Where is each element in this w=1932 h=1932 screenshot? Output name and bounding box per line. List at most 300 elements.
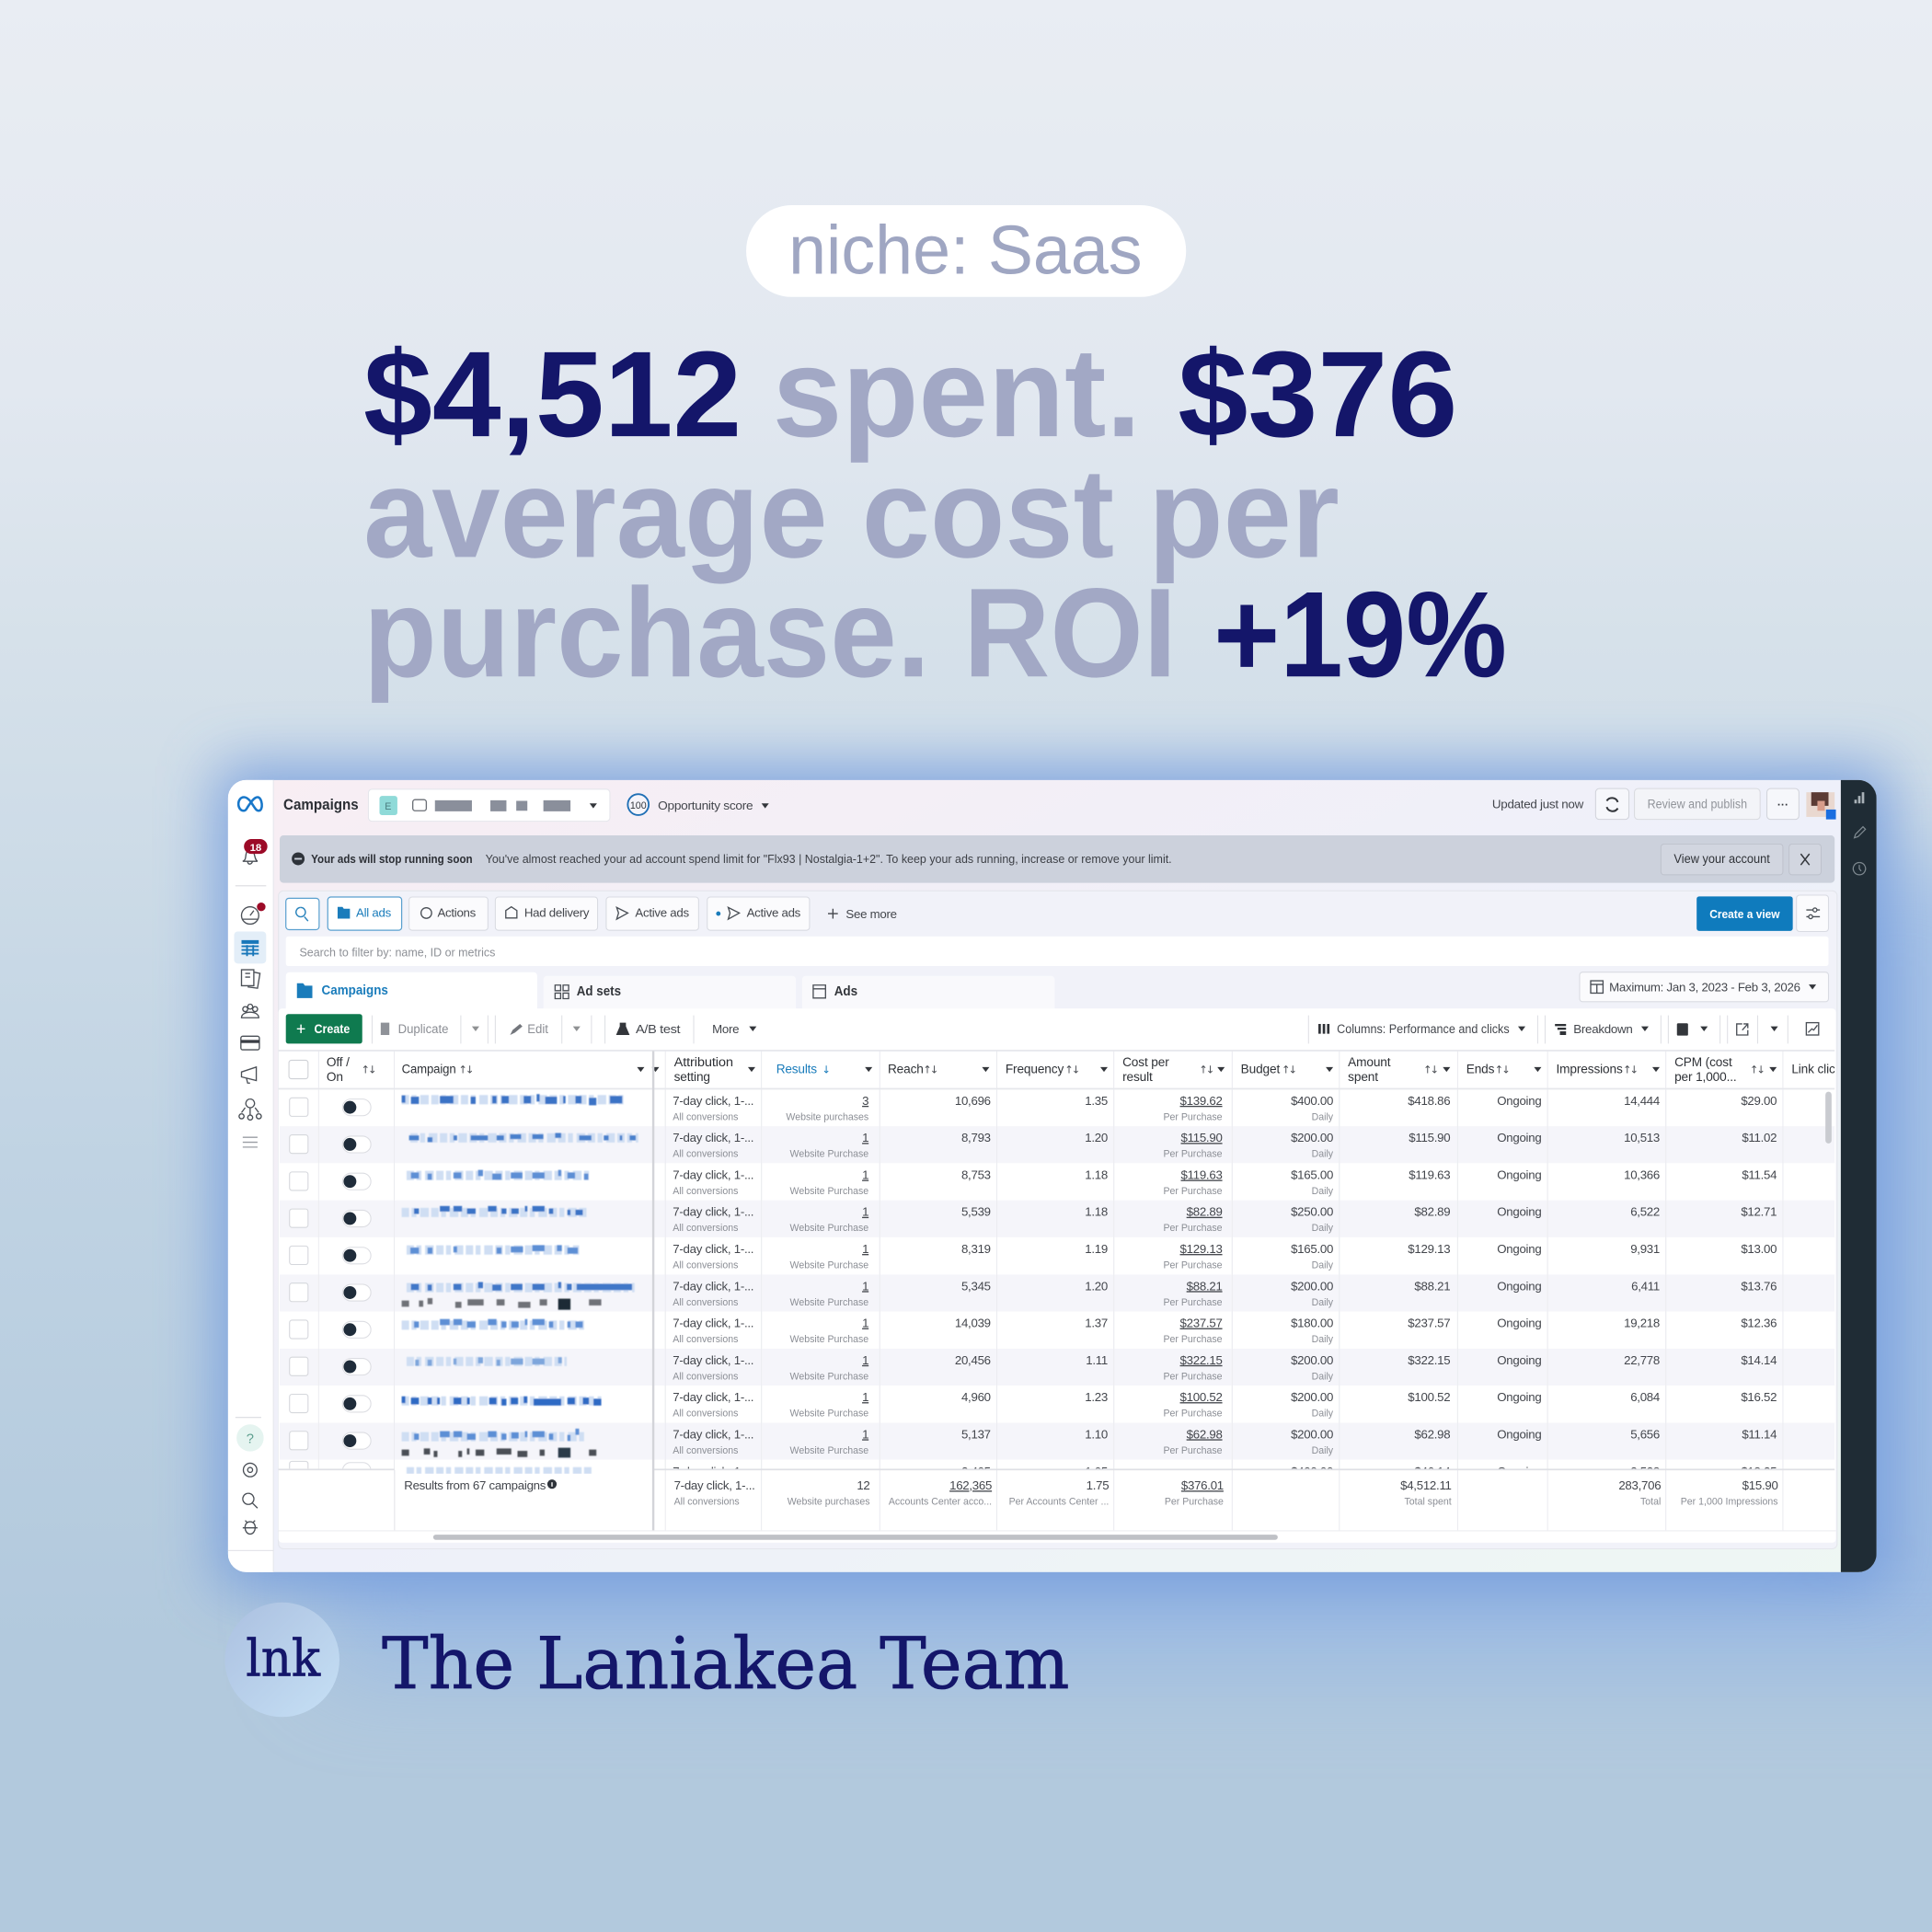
- icon: notification bell: 18: [250, 843, 261, 854]
- table row 6: Per Purchase: [1163, 1297, 1223, 1308]
- table row 1: Ongoing: [1497, 1094, 1541, 1108]
- create button: Create: [315, 1022, 350, 1036]
- duplicate button: [372, 1016, 488, 1043]
- edit button: [495, 1016, 592, 1043]
- table row 2: $200.00: [1291, 1131, 1333, 1144]
- table row 7: All conversions: [673, 1334, 738, 1345]
- table row 7: $12.36: [1741, 1317, 1777, 1330]
- table header: CPM (cost: [1674, 1055, 1732, 1069]
- see more: See more: [845, 907, 897, 921]
- active ads chip: Active ads: [635, 905, 689, 919]
- table row 1: $29.00: [1741, 1094, 1777, 1108]
- table row 4: $12.71: [1741, 1205, 1777, 1219]
- table row 3: $119.63: [1181, 1167, 1223, 1181]
- niche pill: niche: Saas: [788, 211, 1143, 288]
- table row 6: $13.76: [1741, 1279, 1777, 1293]
- left navigation sidebar: [228, 780, 274, 1572]
- partially hidden table row 11: [290, 1461, 1777, 1479]
- table row 5: 7-day click, 1-...: [673, 1242, 753, 1256]
- frozen column divider: [652, 1051, 654, 1530]
- actions chip: [409, 897, 488, 930]
- table header: ↑↓: [1423, 1064, 1437, 1076]
- table row 4: All conversions: [673, 1223, 738, 1234]
- table header: Impressions: [1557, 1063, 1623, 1076]
- table row 8: 20,456: [955, 1353, 991, 1367]
- horizontal scrollbar: [433, 1535, 1278, 1540]
- table row 1: $418.86: [1408, 1094, 1450, 1108]
- table row 6: Daily: [1312, 1297, 1334, 1308]
- table row 2: $115.90: [1181, 1131, 1223, 1144]
- table row 5: [290, 1242, 1777, 1271]
- table header: Link clicks: [1791, 1063, 1847, 1076]
- table row 4: Website Purchase: [790, 1223, 868, 1234]
- table row 4: 1.18: [1085, 1205, 1108, 1219]
- table row 8: Website Purchase: [790, 1371, 868, 1382]
- create a view button: [1696, 896, 1793, 931]
- close button: [1789, 844, 1821, 875]
- table row 5: 1: [862, 1242, 868, 1256]
- icon: notification bell: [243, 839, 268, 864]
- table row 7: 19,218: [1624, 1317, 1660, 1330]
- icon: help: ?: [247, 1432, 254, 1446]
- table row 7: Ongoing: [1497, 1317, 1541, 1330]
- icon: pencil: [1855, 827, 1866, 838]
- icon: alert: [292, 853, 305, 865]
- more button: [1767, 788, 1799, 820]
- table row 2: Website Purchase: [790, 1149, 868, 1160]
- blue glow behind dashboard: [217, 766, 1890, 1590]
- table row 4: Daily: [1312, 1223, 1334, 1234]
- tab: ads: [802, 976, 1054, 1009]
- table row 10: $62.98: [1187, 1427, 1223, 1441]
- table row 1: 3: [862, 1094, 868, 1108]
- table row 3: $165.00: [1291, 1167, 1333, 1181]
- table row 10: 7-day click, 1-...: [673, 1427, 753, 1441]
- opportunity score: [627, 794, 769, 815]
- table header: ↑↓: [1495, 1064, 1509, 1076]
- more menu: [712, 1022, 756, 1036]
- icon: bug: [243, 1521, 258, 1534]
- table row 7: 1.37: [1085, 1317, 1108, 1330]
- table row 2: Per Purchase: [1163, 1149, 1223, 1160]
- table row 9: [290, 1390, 1777, 1420]
- table row 10: 5,137: [961, 1427, 991, 1441]
- chart icon button: [1806, 1023, 1819, 1035]
- table row 2: 7-day click, 1-...: [673, 1131, 753, 1144]
- refresh button: [1595, 788, 1629, 820]
- table row 5: Per Purchase: [1163, 1260, 1223, 1271]
- headline: $4,512: [363, 327, 742, 463]
- table row 6: All conversions: [673, 1297, 738, 1308]
- table row 9: 1: [862, 1390, 868, 1404]
- table row 5: Daily: [1312, 1260, 1334, 1271]
- icon: meta logo: [238, 798, 262, 811]
- table row 6: $200.00: [1291, 1279, 1333, 1293]
- all ads chip: All ads: [356, 905, 392, 919]
- table row 10: Daily: [1312, 1445, 1334, 1456]
- table row 9: Per Purchase: [1163, 1409, 1223, 1420]
- breakdown selector: Breakdown: [1573, 1022, 1633, 1036]
- table row 4: 5,539: [961, 1205, 991, 1219]
- table row 3: [290, 1167, 1777, 1197]
- table row 2: Ongoing: [1497, 1131, 1541, 1144]
- headline: +19%: [1213, 567, 1507, 703]
- alert banner: Your ads will stop running soon: [311, 852, 473, 866]
- table row 8: 1: [862, 1353, 868, 1367]
- table row 6: Ongoing: [1497, 1279, 1541, 1293]
- table header: Cost per: [1122, 1055, 1169, 1069]
- table totals footer: [279, 1468, 1836, 1531]
- icon: help: [236, 1424, 264, 1452]
- active ads chip with dot: [707, 897, 810, 930]
- table row 8: 1.11: [1086, 1353, 1108, 1367]
- table header: Ends: [1466, 1063, 1495, 1076]
- active ads chip: [606, 897, 698, 930]
- level tabs: [286, 972, 1828, 1009]
- table row 1: Website purchases: [786, 1111, 868, 1122]
- icon: gauge: [241, 903, 266, 924]
- icon: chart: [1855, 792, 1864, 803]
- table row 6: 1: [862, 1279, 868, 1293]
- columns selector: Columns: Performance and clicks: [1337, 1022, 1510, 1036]
- all ads chip: [328, 897, 402, 930]
- table column dividers: [318, 1051, 1783, 1530]
- table row 5: 9,931: [1630, 1242, 1660, 1256]
- table header: [279, 1050, 1847, 1089]
- review and publish button: [1635, 788, 1760, 820]
- table row 9: 4,960: [961, 1390, 991, 1404]
- table header: ↑↓: [458, 1064, 473, 1076]
- header checkbox: [289, 1060, 308, 1079]
- table row 9: $100.52: [1408, 1390, 1450, 1404]
- table header: Amount: [1348, 1055, 1391, 1069]
- edit button: Edit: [527, 1022, 548, 1036]
- table row 4: Ongoing: [1497, 1205, 1541, 1219]
- table row 8: Daily: [1312, 1371, 1334, 1382]
- table row 1: 7-day click, 1-...: [673, 1094, 753, 1108]
- headline: average cost per: [363, 443, 1340, 584]
- table row 3: 8,753: [961, 1167, 991, 1181]
- table row 6: 1.20: [1085, 1279, 1108, 1293]
- table row 1: All conversions: [673, 1111, 738, 1122]
- headline: $376: [1178, 327, 1457, 463]
- table header: Campaign: [402, 1063, 456, 1076]
- columns selector: [1308, 1016, 1537, 1043]
- table header: Frequency: [1006, 1063, 1064, 1076]
- table row 6: [290, 1279, 1777, 1308]
- table row 10: [290, 1427, 1777, 1456]
- table row 8: 22,778: [1624, 1353, 1660, 1367]
- table row 5: Website Purchase: [790, 1260, 868, 1271]
- top bar: Campaigns: [283, 796, 359, 813]
- top bar: [283, 788, 1836, 822]
- table row 10: Ongoing: [1497, 1427, 1541, 1441]
- table row 1: 10,696: [955, 1094, 991, 1108]
- date range picker: [1580, 972, 1829, 1002]
- table row 2: Daily: [1312, 1149, 1334, 1160]
- tab: ads: Ads: [834, 984, 857, 999]
- table row 6: 5,345: [961, 1279, 991, 1293]
- table row 8: 7-day click, 1-...: [673, 1353, 753, 1367]
- table row 6: 6,411: [1631, 1279, 1660, 1293]
- panel: ads manager dashboard: [228, 780, 1877, 1572]
- headline: spent.: [773, 322, 1141, 464]
- search chip: [286, 898, 319, 929]
- icon: clock: [1853, 863, 1866, 875]
- table row 5: $129.13: [1408, 1242, 1450, 1256]
- table header: ↑↓: [1064, 1064, 1079, 1076]
- table totals footer: Per Purchase: [1165, 1496, 1224, 1507]
- table row 8: $322.15: [1180, 1353, 1223, 1367]
- table row 8: [290, 1353, 1777, 1382]
- partially hidden table row 11: 7-day click, 1-...: [673, 1465, 753, 1478]
- right dark sidebar: [1841, 780, 1877, 1572]
- icon: search: [243, 1493, 258, 1508]
- table row 4: 6,522: [1630, 1205, 1660, 1219]
- table row 2: 1: [862, 1131, 868, 1144]
- alert banner: You've almost reached your ad account spend limit for "Flx93 | Nostalgia-1+2". To keep your ads running, increase or remove your limit.: [486, 852, 1172, 866]
- had delivery chip: Had delivery: [524, 905, 590, 919]
- table row 1: $400.00: [1291, 1094, 1333, 1108]
- table row 4: $250.00: [1291, 1205, 1333, 1219]
- table row 9: Daily: [1312, 1409, 1334, 1420]
- table row 1: 14,444: [1624, 1094, 1660, 1108]
- view account button: [1661, 844, 1783, 875]
- table row 6: 7-day click, 1-...: [673, 1279, 753, 1293]
- filter chips row: [286, 895, 1828, 931]
- ab test button: A/B test: [636, 1022, 681, 1036]
- table row 2: All conversions: [673, 1149, 738, 1160]
- table row 3: Website Purchase: [790, 1186, 868, 1197]
- icon: campaigns table active: [234, 931, 266, 963]
- tab: campaigns: Campaigns: [322, 983, 388, 998]
- search field: [286, 937, 1828, 966]
- icon: audience: [241, 1005, 259, 1018]
- table row 8: All conversions: [673, 1371, 738, 1382]
- table totals footer: All conversions: [674, 1496, 740, 1507]
- brand logo disc: [224, 1603, 339, 1717]
- table row 7: $237.57: [1408, 1317, 1450, 1330]
- table row 3: $11.54: [1742, 1167, 1777, 1181]
- table row 4: [290, 1205, 1777, 1234]
- table totals footer: 1.75: [1087, 1478, 1109, 1492]
- table row 7: 14,039: [955, 1317, 991, 1330]
- search field: Search to filter by: name, ID or metrics: [299, 945, 496, 959]
- table row 3: Per Purchase: [1163, 1186, 1223, 1197]
- table row 7: $237.57: [1180, 1317, 1223, 1330]
- table row 10: $62.98: [1414, 1427, 1450, 1441]
- table row 5: $13.00: [1741, 1242, 1777, 1256]
- headline: purchase. ROI: [363, 562, 1177, 704]
- export icon button: [1728, 1016, 1788, 1043]
- tab: campaigns: [286, 972, 537, 1009]
- table totals footer: Results from 67 campaigns: [404, 1478, 546, 1492]
- table header: Budget: [1241, 1063, 1280, 1076]
- table row 5: 1.19: [1085, 1242, 1108, 1256]
- table row 10: Website Purchase: [790, 1445, 868, 1456]
- table row 3: 10,366: [1624, 1167, 1660, 1181]
- table header: ↑↓: [1282, 1064, 1295, 1076]
- breakdown selector: [1545, 1016, 1661, 1043]
- table row 5: Ongoing: [1497, 1242, 1541, 1256]
- table row 9: $200.00: [1291, 1390, 1333, 1404]
- table row 3: 1: [862, 1167, 868, 1181]
- table header: Results: [776, 1063, 817, 1076]
- table row 4: 7-day click, 1-...: [673, 1205, 753, 1219]
- tab: ad sets: Ad sets: [577, 984, 621, 999]
- table row 5: $129.13: [1180, 1242, 1223, 1256]
- table row 10: All conversions: [673, 1445, 738, 1456]
- table row 6: $88.21: [1187, 1279, 1223, 1293]
- icon: menu: [243, 1137, 258, 1147]
- table row 8: Ongoing: [1497, 1353, 1541, 1367]
- table header: Off /: [327, 1055, 350, 1069]
- table header: result: [1122, 1070, 1153, 1084]
- table row 9: 7-day click, 1-...: [673, 1390, 753, 1404]
- partially hidden table row 11: Ongoing: [1497, 1465, 1541, 1478]
- table row 4: 1: [862, 1205, 868, 1219]
- account selector: [368, 789, 610, 822]
- actions chip: Actions: [437, 905, 477, 919]
- icon: documents: [241, 970, 260, 988]
- table row 1: Daily: [1312, 1111, 1334, 1122]
- table row 9: 6,084: [1630, 1390, 1660, 1404]
- table row 2: [290, 1131, 1777, 1160]
- icon: megaphone: [241, 1067, 257, 1083]
- table row 3: Daily: [1312, 1186, 1334, 1197]
- partially hidden table row 11: $46.14: [1414, 1465, 1450, 1478]
- table header: ↑↓: [1750, 1064, 1764, 1076]
- table row 10: 5,656: [1630, 1427, 1660, 1441]
- table header: per 1,000...: [1674, 1070, 1737, 1084]
- table row 10: 1.10: [1085, 1427, 1108, 1441]
- headline: [363, 322, 1507, 704]
- partially hidden table row 11: 2,405: [961, 1465, 991, 1478]
- active ads chip with dot: Active ads: [747, 905, 801, 919]
- table row 7: Daily: [1312, 1334, 1334, 1345]
- vertical scrollbar: [1825, 1092, 1832, 1144]
- table row 9: Website Purchase: [790, 1409, 868, 1420]
- alternating row backgrounds: [280, 1126, 1834, 1460]
- icon: billing card: [241, 1036, 259, 1050]
- table row 4: $82.89: [1414, 1205, 1450, 1219]
- table row 7: [290, 1317, 1777, 1345]
- table header: ↑↓: [1199, 1064, 1213, 1076]
- table row 1: Per Purchase: [1163, 1111, 1223, 1122]
- table row 7: Per Purchase: [1163, 1334, 1223, 1345]
- opportunity score: Opportunity score: [658, 799, 753, 812]
- table row 3: All conversions: [673, 1186, 738, 1197]
- avatar: [1806, 792, 1836, 820]
- partially hidden table row 11: 1.05: [1085, 1465, 1108, 1478]
- duplicate button: Duplicate: [398, 1022, 448, 1036]
- partially hidden table row 11: $400.00: [1291, 1465, 1333, 1478]
- table totals footer: Total spent: [1405, 1496, 1452, 1507]
- table row 2: $115.90: [1409, 1131, 1450, 1144]
- table row 9: All conversions: [673, 1409, 738, 1420]
- table row 3: $119.63: [1409, 1167, 1450, 1181]
- brand logo disc: lnk: [246, 1628, 321, 1687]
- table totals footer: 12: [857, 1478, 870, 1492]
- table totals footer: 7-day click, 1-...: [674, 1478, 755, 1492]
- table row 8: Per Purchase: [1163, 1371, 1223, 1382]
- table row 5: $165.00: [1291, 1242, 1333, 1256]
- reports icon button: [1668, 1016, 1720, 1043]
- partially hidden table row 11: 2,528: [1630, 1465, 1660, 1478]
- ab test button: [605, 1016, 694, 1043]
- table header: setting: [674, 1070, 710, 1084]
- niche pill: [746, 205, 1186, 297]
- icon: settings: [244, 1463, 257, 1477]
- review and publish button: Review and publish: [1648, 798, 1747, 811]
- table row 5: 8,319: [961, 1242, 991, 1256]
- table totals footer: Website purchases: [788, 1496, 870, 1507]
- table header: ↑↓: [361, 1064, 375, 1076]
- table totals footer: $4,512.11: [1400, 1478, 1452, 1492]
- white table area: [279, 1008, 1836, 1543]
- table row 3: 7-day click, 1-...: [673, 1167, 753, 1181]
- table row 3: 1.18: [1085, 1167, 1108, 1181]
- table row 3: Ongoing: [1497, 1167, 1541, 1181]
- table row 4: $82.89: [1187, 1205, 1223, 1219]
- table header: ↑↓: [923, 1064, 937, 1076]
- table row 6: Website Purchase: [790, 1297, 868, 1308]
- table row 9: $100.52: [1180, 1390, 1223, 1404]
- table row 6: $88.21: [1414, 1279, 1450, 1293]
- opportunity score: 100: [630, 800, 647, 811]
- table totals footer: $15.90: [1742, 1478, 1778, 1492]
- table totals footer: Per Accounts Center ...: [1009, 1496, 1109, 1507]
- table header: Attribution: [674, 1055, 733, 1069]
- table row 7: 7-day click, 1-...: [673, 1317, 753, 1330]
- table totals footer: Total: [1640, 1496, 1661, 1507]
- table header: On: [327, 1070, 343, 1084]
- table row 10: 1: [862, 1427, 868, 1441]
- table row 7: 1: [862, 1317, 868, 1330]
- create button: [286, 1014, 362, 1043]
- table row 8: $14.14: [1741, 1353, 1777, 1367]
- more menu: More: [712, 1022, 739, 1036]
- table row 5: All conversions: [673, 1260, 738, 1271]
- table row 10: $200.00: [1291, 1427, 1333, 1441]
- table row 2: $11.02: [1742, 1131, 1777, 1144]
- date range picker: Maximum: Jan 3, 2023 - Feb 3, 2026: [1609, 980, 1800, 994]
- table row 10: Per Purchase: [1163, 1445, 1223, 1456]
- view account button: View your account: [1673, 852, 1770, 866]
- table row 10: $11.14: [1742, 1427, 1777, 1441]
- table totals footer: 162,365: [949, 1478, 992, 1492]
- table row 9: 1.23: [1085, 1390, 1108, 1404]
- create a view button: Create a view: [1709, 907, 1781, 921]
- table header: ↑↓: [1623, 1064, 1637, 1076]
- table row 2: 10,513: [1624, 1131, 1660, 1144]
- alert banner: [280, 835, 1834, 883]
- toolbar: [286, 1014, 1819, 1043]
- table row 8: $322.15: [1408, 1353, 1450, 1367]
- more button: ···: [1777, 799, 1788, 811]
- table totals footer: Per 1,000 Impressions: [1681, 1496, 1778, 1507]
- tab: ad sets: [544, 976, 796, 1009]
- partially hidden table row 11: $18.25: [1741, 1465, 1777, 1478]
- table totals footer: Accounts Center acco...: [889, 1496, 992, 1507]
- table row 2: 1.20: [1085, 1131, 1108, 1144]
- table header: ↓: [822, 1064, 829, 1076]
- pixelated campaign names: [402, 1098, 638, 1472]
- table totals footer: 283,706: [1618, 1478, 1661, 1492]
- content panel: [279, 891, 1837, 1548]
- table row 9: $16.52: [1741, 1390, 1777, 1404]
- table row 4: Per Purchase: [1163, 1223, 1223, 1234]
